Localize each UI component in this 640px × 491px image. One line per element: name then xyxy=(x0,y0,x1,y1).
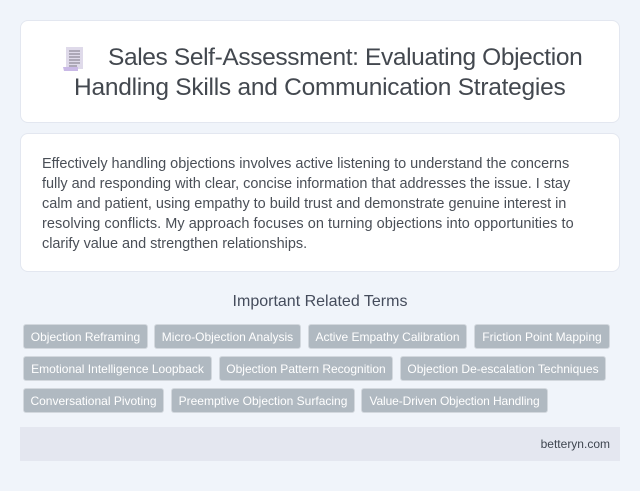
tag xyxy=(308,324,467,349)
footer site name: betteryn.com xyxy=(541,437,610,451)
description text xyxy=(42,156,574,252)
tag xyxy=(171,388,355,413)
description text: resolving conflicts. My approach focuses on turning objections into opportunities to xyxy=(42,216,574,232)
tag xyxy=(23,324,148,349)
tag xyxy=(474,324,610,349)
tag: Friction Point Mapping xyxy=(482,330,602,344)
tag xyxy=(23,388,164,413)
panel: tag list xyxy=(23,324,610,413)
panel: description card xyxy=(20,133,620,272)
heading: related terms: Important Related Terms xyxy=(233,293,407,310)
tag: Objection Pattern Recognition xyxy=(226,362,386,376)
description text: clarify value and strengthen relationships. xyxy=(42,236,307,252)
tag: Objection Reframing xyxy=(31,330,140,344)
tag: Micro-Objection Analysis xyxy=(162,330,293,344)
footer bar xyxy=(20,427,620,461)
tag xyxy=(23,356,212,381)
tag xyxy=(219,356,393,381)
tag: Emotional Intelligence Loopback xyxy=(31,362,204,376)
description text: calm and patient, using empathy to build trust and demonstrate genuine interest in xyxy=(42,196,566,212)
tag: Value-Driven Objection Handling xyxy=(369,394,540,408)
icon: paper scroll xyxy=(63,47,83,71)
description text: Effectively handling objections involves active listening to understand the concerns xyxy=(42,156,569,172)
tag xyxy=(400,356,606,381)
tag: Objection De-escalation Techniques xyxy=(407,362,599,376)
tag xyxy=(361,388,548,413)
panel: title card xyxy=(20,20,620,123)
tag: Active Empathy Calibration xyxy=(315,330,460,344)
tag: Preemptive Objection Surfacing xyxy=(179,394,347,408)
title line 1: Sales Self-Assessment: Evaluating Objection xyxy=(108,44,582,71)
tag xyxy=(154,324,301,349)
description text: fully and responding with clear, concise information that addresses the issue. I stay xyxy=(42,176,570,192)
tag: Conversational Pivoting xyxy=(30,394,157,408)
title line 2: Handling Skills and Communication Strategies xyxy=(74,74,566,101)
